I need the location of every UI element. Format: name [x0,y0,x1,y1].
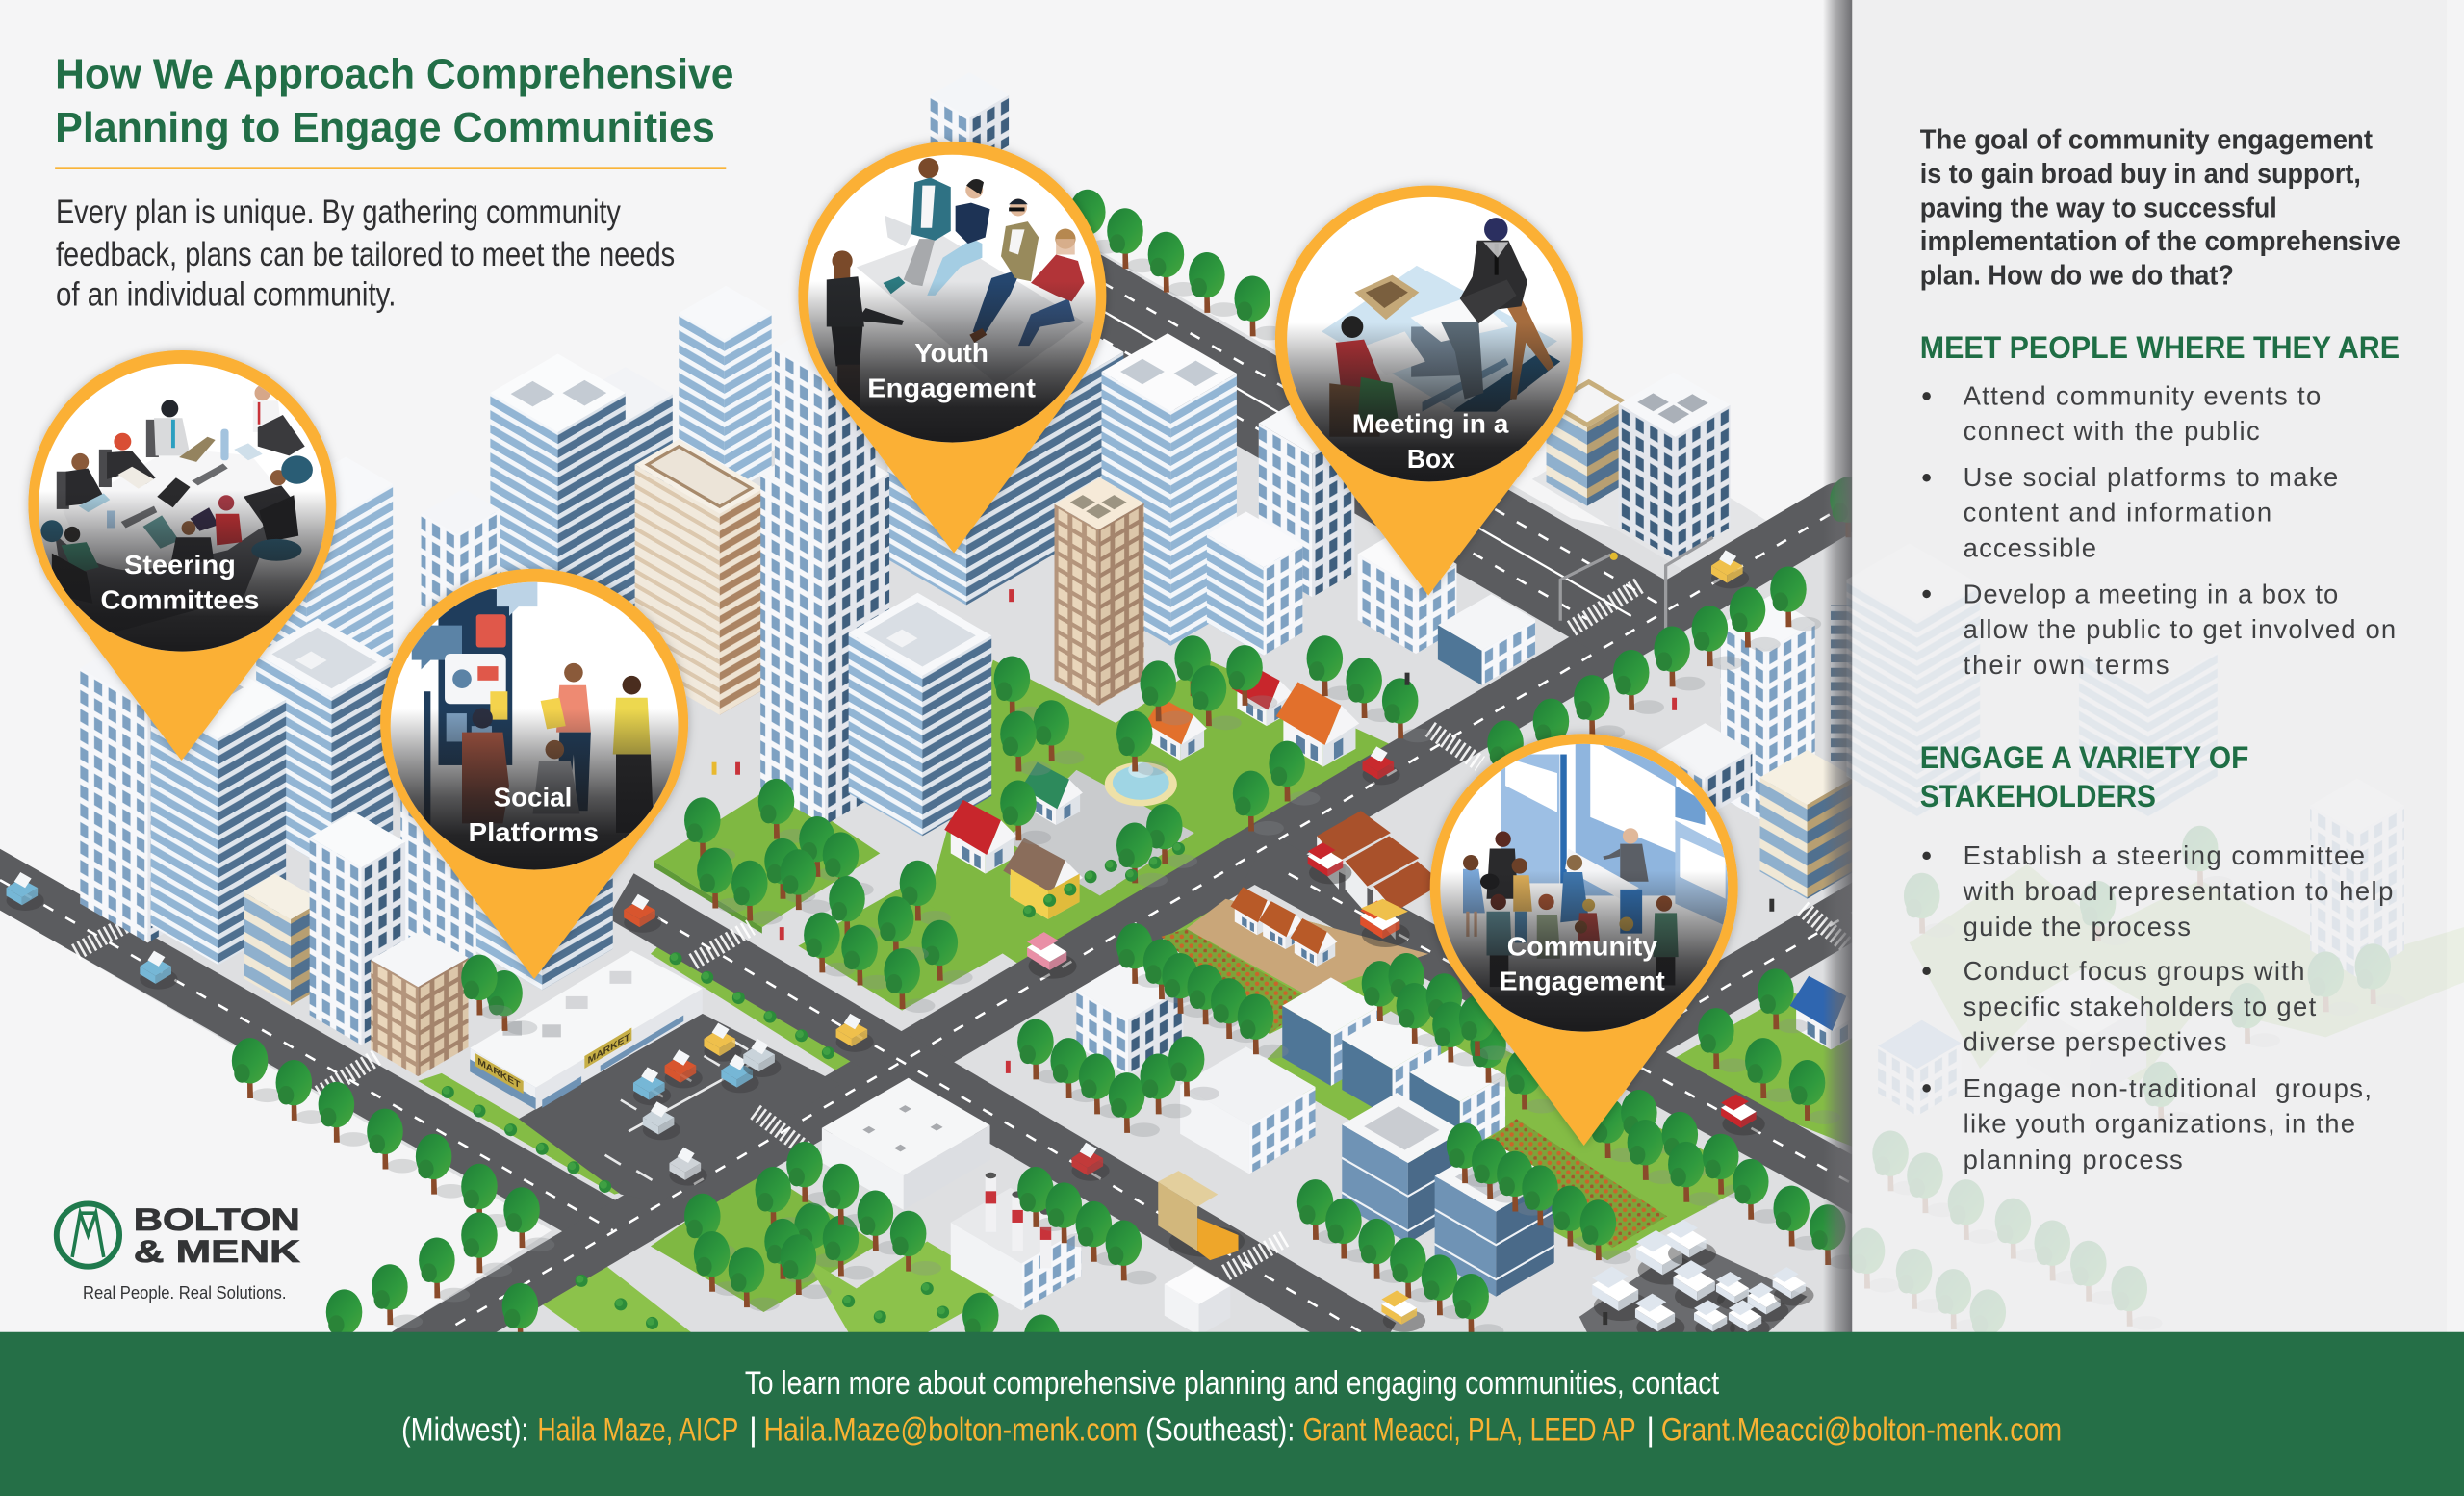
label: Meeting in a [1352,408,1509,438]
heading: engage stakeholders: STAKEHOLDERS [1920,778,2156,813]
label: Platforms [469,817,599,847]
bullet list: meet people: connect with the public [1964,416,2260,446]
bullet list: meet people: Develop a meeting in a box to [1964,579,2338,608]
chimney factory [951,1173,1081,1310]
label: Social [494,782,572,812]
bullet list: stakeholders: Establish a steering committee [1964,840,2365,870]
green park blocks [418,660,1855,1332]
bullet list: meet people: Use social platforms to make [1964,462,2338,492]
back towers [259,72,1731,723]
intro text: of an individual community. [56,275,396,313]
road markings [0,283,1855,1336]
footer contacts: | [1646,1411,1655,1448]
scene: seated youth group [827,158,1085,412]
brown tower [1055,477,1144,706]
footer contacts: Grant Meacci, PLA, LEED AP [1302,1411,1636,1448]
footer line one: To learn more about comprehensive planning and engaging communities, contact [745,1365,1720,1402]
label: Youth [914,338,988,368]
trees [232,190,1881,1379]
pin: Steering Committees [28,350,336,761]
faint city watermark [1846,543,2464,1354]
label [100,550,259,615]
title [55,51,733,151]
title rule [55,167,726,169]
footer contacts [401,1411,2062,1448]
scene: social media board [412,580,654,833]
market sign right: MARKET [588,1031,630,1067]
logo: Bolton & Menk: Real People. Real Solutions. [83,1282,286,1303]
crop field right [1483,1119,1667,1248]
dirt lot [1187,899,1428,994]
footer contacts: (Southeast): [1145,1411,1295,1448]
crop field [1162,929,1312,1034]
footer contacts: Haila Maze, AICP [537,1411,738,1448]
far right striped tower under panel edge [1831,605,1853,762]
bullet list: stakeholders: specific stakeholders to get [1964,992,2317,1021]
footer contacts: Grant.Meacci@bolton-menk.com [1661,1411,2062,1448]
traffic signal [1560,537,1713,644]
tower plaza [1532,427,1776,579]
scene: community service counter [1463,738,1729,987]
panel shadow edge [1823,0,1853,1332]
label: Committees [100,585,259,615]
pin: Social Platforms [380,569,688,979]
shade [808,155,1096,443]
bullet list: meet people: allow the public to get involved on [1964,614,2396,644]
goal statement: paving the way to successful [1920,193,2277,224]
logo: Bolton & Menk: BOLTON [134,1201,300,1237]
scene: meeting in a box desk [1322,218,1560,437]
bullet list: stakeholders: diverse perspectives [1964,1027,2226,1057]
label: Steering [124,550,236,580]
hedges and shrubs [442,842,1185,1329]
bullet list: stakeholders: guide the process [1964,912,2191,941]
roads [0,293,1870,1353]
bullet list: stakeholders: like youth organizations, in the [1964,1109,2355,1139]
shade [391,582,678,870]
parking lot [519,1014,840,1202]
block buildings [1076,596,1855,1336]
pin: Youth Engagement [798,142,1106,554]
goal statement: implementation of the comprehensive [1920,226,2400,257]
footer band [0,1332,2464,1496]
label: Community [1507,931,1658,961]
bullet list: stakeholders: Conduct focus groups with [1964,956,2304,986]
pedestrians [712,589,1774,1325]
title: How We Approach Comprehensive [55,51,733,97]
city ground [0,251,1855,1332]
bullet list: meet people: Attend community events to [1964,380,2321,410]
bullet list: stakeholders: with broad representation to help [1963,876,2393,906]
bullet list: meet people: content and information [1964,498,2272,528]
title: Planning to Engage Communities [55,105,715,151]
market building [470,951,703,1109]
mid towers [849,512,1535,836]
vehicles [7,550,1765,1332]
bullet list: stakeholders [1922,840,2393,1174]
fountain [1105,762,1177,806]
logo: Bolton & Menk [57,1201,300,1303]
barns [1317,811,1443,940]
label: Box [1407,444,1455,474]
label: Engagement [1500,966,1665,995]
market sign left: MARKET [477,1056,521,1092]
bullet list: stakeholders: Engage non-traditional groups, [1964,1073,2372,1103]
tall white tower with stepped top [760,319,889,825]
houses [944,663,1862,1049]
intro text: feedback, plans can be tailored to meet the needs [56,236,675,273]
logo: Bolton & Menk: & MENK [134,1233,300,1269]
low center building [822,1078,990,1210]
bullet list: stakeholders: planning process [1964,1145,2183,1174]
label [1352,408,1509,474]
bullet list: meet people: accessible [1964,533,2096,563]
pin: Community Engagement [1430,734,1738,1146]
heading: engage stakeholders: ENGAGE A VARIETY OF [1920,739,2248,775]
label [469,782,599,847]
right panel [1846,0,2464,1354]
footer contacts: (Midwest): [401,1411,528,1448]
goal statement [1920,125,2400,291]
intro text: Every plan is unique. By gathering community [56,193,621,231]
intro text [56,193,675,313]
isometric city illustration [0,72,1881,1379]
heading: meet people: MEET PEOPLE WHERE THEY ARE [1920,329,2400,365]
label [867,338,1036,402]
shade [38,364,326,652]
heading: engage stakeholders [1920,739,2248,813]
goal statement: plan. How do we do that? [1920,260,2234,291]
goal statement: The goal of community engagement [1920,125,2374,156]
left towers [80,618,613,1076]
footer contacts: | [749,1411,757,1448]
van depot [1579,1220,1813,1340]
bullet list: meet people [1922,380,2396,680]
scene: boardroom table [40,385,313,644]
label [1500,931,1665,995]
goal statement: is to gain broad buy in and support, [1920,159,2361,190]
cream tower [635,439,763,715]
shade [1287,197,1572,481]
pin: Meeting in a Box [1275,186,1583,596]
parking markings [605,1041,765,1180]
footer contacts: Haila.Maze@bolton-menk.com [763,1411,1138,1448]
label: Engagement [867,373,1036,402]
shade [1440,744,1728,1032]
bullet list: meet people: their own terms [1964,650,2169,680]
